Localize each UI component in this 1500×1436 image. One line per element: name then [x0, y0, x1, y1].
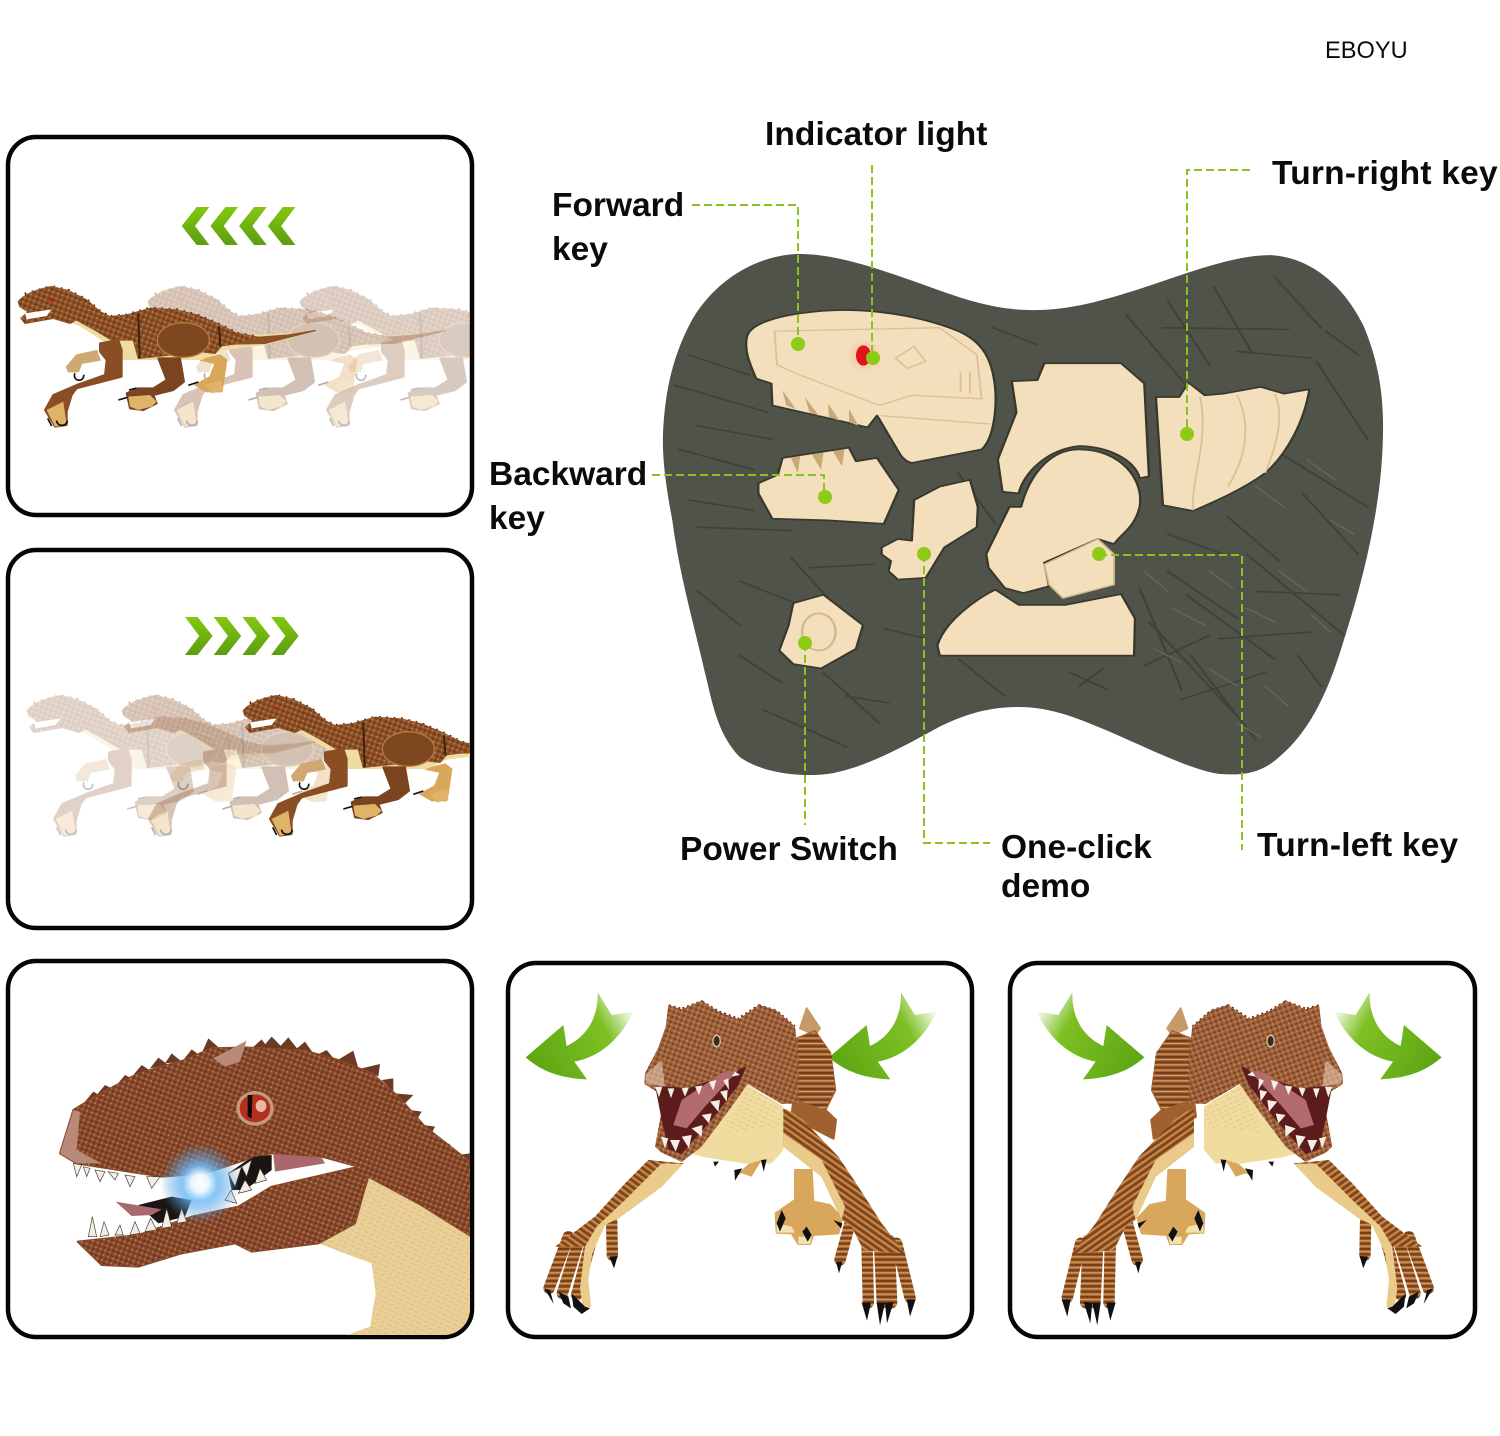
remote: jaw button (backward): [758, 448, 899, 524]
label: turn-right key: Turn-right key: [1272, 155, 1498, 192]
label: forward key: Forward: [552, 187, 684, 224]
leader line: one-click demo: [917, 547, 990, 843]
leader line: indicator light: [866, 165, 880, 365]
leader line: turn-left key: [1092, 547, 1242, 850]
remote: head button (forward / indicator): [746, 310, 996, 463]
panel: move backward: [6, 548, 474, 930]
remote: thigh button (turn left): [986, 449, 1140, 598]
dinosaur head close-up: [60, 1037, 472, 1338]
panel: glowing mouth light: [8, 961, 472, 1338]
leader line: power switch: [798, 636, 812, 825]
dinosaur front view turning right: [1062, 1001, 1433, 1325]
label: backward key: key: [489, 500, 545, 537]
remote: power button: [779, 595, 863, 668]
label: backward key: Backward: [489, 456, 647, 493]
leader line: forward key: [692, 205, 805, 351]
label: one-click demo: One-click: [1001, 829, 1152, 866]
brand name: EBOYU: [1325, 38, 1408, 64]
label: power switch: Power Switch: [680, 831, 898, 868]
remote: body piece: [998, 363, 1149, 493]
icon: left chevrons: [182, 207, 295, 245]
panel: turn right: [1010, 963, 1475, 1337]
dinosaur walking right with motion ghosts: [26, 694, 470, 837]
remote: tail button (turn right): [1156, 382, 1309, 511]
label: turn-left key: Turn-left key: [1257, 827, 1459, 864]
icon: right chevrons: [185, 617, 299, 655]
leader line: backward key: [652, 475, 832, 504]
remote control: [663, 254, 1383, 775]
label: one-click demo: demo: [1001, 868, 1090, 905]
remote: arm button (one-click demo): [882, 480, 978, 580]
arrows: turning right: [1037, 992, 1442, 1079]
arrows: turning left: [526, 992, 937, 1079]
remote: foot piece: [937, 590, 1135, 656]
dinosaur front view turning left: [544, 1001, 916, 1325]
panel: turn left: [508, 963, 972, 1337]
panel: move forward: [6, 134, 474, 518]
label: indicator light: Indicator light: [765, 116, 988, 153]
leader line: turn-right key: [1180, 170, 1250, 441]
label: forward key: key: [552, 231, 608, 268]
dinosaur walking left with motion ghosts: [18, 285, 470, 428]
remote surface texture: [675, 277, 1368, 747]
